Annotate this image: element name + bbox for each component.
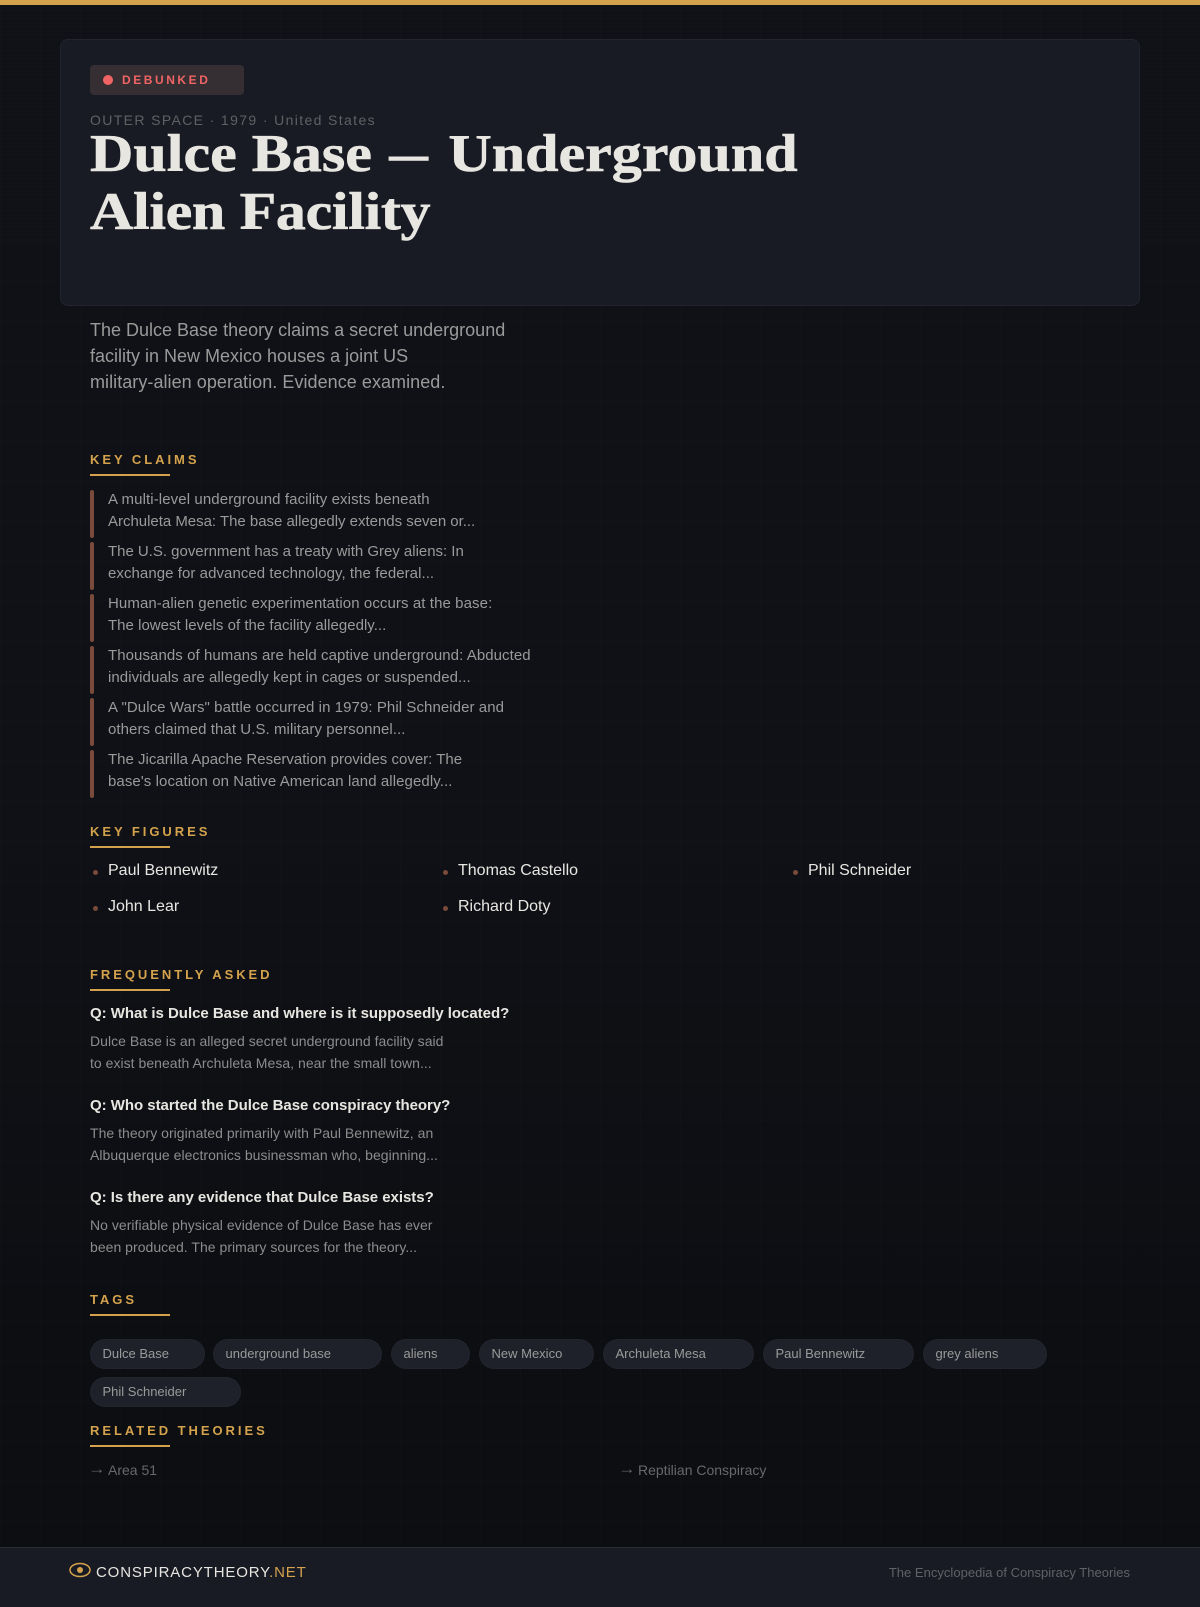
claim 1	[90, 490, 475, 538]
figure: Richard Doty: Richard Doty	[458, 898, 550, 915]
claim 2	[90, 542, 464, 590]
claim 4: individuals are allegedly kept in cages or suspended...	[108, 669, 471, 686]
claim 5: A "Dulce Wars" battle occurred in 1979: Phil Schneider and	[108, 699, 504, 716]
tag: Dulce Base	[90, 1339, 205, 1369]
tag: Phil Schneider: Phil Schneider	[102, 1384, 186, 1399]
tag: Dulce Base: Dulce Base	[102, 1346, 169, 1361]
tag: aliens	[391, 1339, 470, 1369]
tag: grey aliens	[923, 1339, 1047, 1369]
tag: Paul Bennewitz	[763, 1339, 914, 1369]
related link: Reptilian Conspiracy: →	[618, 1460, 636, 1476]
claim 1: A multi-level underground facility exists beneath	[108, 491, 430, 508]
FAQ item 1: Q: What is Dulce Base and where is it supposedly located?	[90, 1005, 509, 1022]
heading: key claims: KEY CLAIMS	[90, 452, 199, 467]
panel: key figures grid	[93, 862, 911, 915]
figure: Phil Schneider: Phil Schneider	[808, 862, 911, 879]
title: Dulce Base Underground	[90, 125, 798, 183]
panel: FAQ list	[90, 1005, 509, 1255]
claim 3: Human-alien genetic experimentation occurs at the base:	[108, 595, 492, 612]
badge: debunked	[90, 65, 244, 95]
meta line: OUTER SPACE · 1979 · United States	[90, 112, 376, 128]
related link: Area 51: Area 51	[108, 1462, 157, 1478]
panel: header hero	[60, 39, 1140, 306]
FAQ item 3: No verifiable physical evidence of Dulce Base has ever	[90, 1217, 432, 1233]
figure: Thomas Castello: Thomas Castello	[458, 862, 578, 879]
claim 4	[90, 646, 531, 694]
heading: frequently asked: FREQUENTLY ASKED	[90, 967, 273, 982]
intro text: The Dulce Base theory claims a secret underground	[90, 320, 505, 340]
FAQ item 1: Dulce Base is an alleged secret underground facility said	[90, 1033, 443, 1049]
FAQ item 1: to exist beneath Archuleta Mesa, near the small town...	[90, 1055, 432, 1071]
related link: Area 51: →	[88, 1460, 106, 1476]
tag: Paul Bennewitz: Paul Bennewitz	[776, 1346, 865, 1361]
FAQ item 2: Q: Who started the Dulce Base conspiracy theory?	[90, 1097, 450, 1114]
title: Alien Facility	[90, 182, 430, 240]
panel: tag pills	[90, 1339, 1047, 1407]
claim 4: Thousands of humans are held captive underground: Abducted	[108, 647, 531, 664]
title: —	[389, 125, 428, 183]
heading: key figures: KEY FIGURES	[90, 824, 210, 839]
footer tagline: The Encyclopedia of Conspiracy Theories	[889, 1565, 1130, 1580]
claim 6: base's location on Native American land allegedly...	[108, 773, 452, 790]
icon: eye logo	[69, 1562, 91, 1578]
related link: Area 51	[88, 1460, 157, 1478]
tag: underground base	[213, 1339, 382, 1369]
claim 2: The U.S. government has a treaty with Grey aliens: In	[108, 543, 464, 560]
tag: aliens: aliens	[404, 1346, 437, 1361]
claim 6	[90, 750, 462, 798]
claim 1: Archuleta Mesa: The base allegedly extends seven or...	[108, 513, 475, 530]
FAQ item 2	[90, 1097, 450, 1163]
related link: Reptilian Conspiracy: Reptilian Conspiracy	[638, 1462, 766, 1478]
tag: grey aliens: grey aliens	[936, 1346, 998, 1361]
panel: footer	[0, 1547, 1200, 1607]
claim 3: The lowest levels of the facility allegedly...	[108, 617, 386, 634]
tag: Archuleta Mesa: Archuleta Mesa	[616, 1346, 706, 1361]
intro text	[90, 320, 505, 392]
claim 5: others claimed that U.S. military personnel...	[108, 721, 406, 738]
tag: Phil Schneider	[90, 1377, 241, 1407]
tag: underground base: underground base	[226, 1346, 331, 1361]
heading: related theories: RELATED THEORIES	[90, 1423, 268, 1438]
FAQ item 3: Q: Is there any evidence that Dulce Base exists?	[90, 1189, 434, 1206]
icon: status dot	[103, 75, 113, 85]
FAQ item 3	[90, 1189, 434, 1255]
tag: New Mexico: New Mexico	[492, 1346, 562, 1361]
intro text: military-alien operation. Evidence examined.	[90, 372, 445, 392]
intro text: facility in New Mexico houses a joint US	[90, 346, 408, 366]
claim 3	[90, 594, 492, 642]
tag: New Mexico	[479, 1339, 594, 1369]
FAQ item 2: The theory originated primarily with Paul Bennewitz, an	[90, 1125, 433, 1141]
logo wordmark: CONSPIRACYTHEORY.NET	[96, 1564, 307, 1581]
claim 2: exchange for advanced technology, the federal...	[108, 565, 434, 582]
FAQ item 1	[90, 1005, 509, 1071]
claim 6: The Jicarilla Apache Reservation provides cover: The	[108, 751, 462, 768]
panel: key claims list	[90, 490, 531, 798]
FAQ item 2: Albuquerque electronics businessman who, beginning...	[90, 1147, 438, 1163]
FAQ item 3: been produced. The primary sources for the theory...	[90, 1239, 417, 1255]
badge label: DEBUNKED	[122, 73, 210, 87]
figure: Paul Bennewitz: Paul Bennewitz	[108, 862, 218, 879]
top accent bar	[0, 0, 1200, 5]
tag: Archuleta Mesa	[603, 1339, 754, 1369]
claim 5	[90, 698, 504, 746]
heading: tags: TAGS	[90, 1292, 137, 1307]
title	[90, 125, 798, 241]
figure: John Lear: John Lear	[108, 898, 179, 915]
